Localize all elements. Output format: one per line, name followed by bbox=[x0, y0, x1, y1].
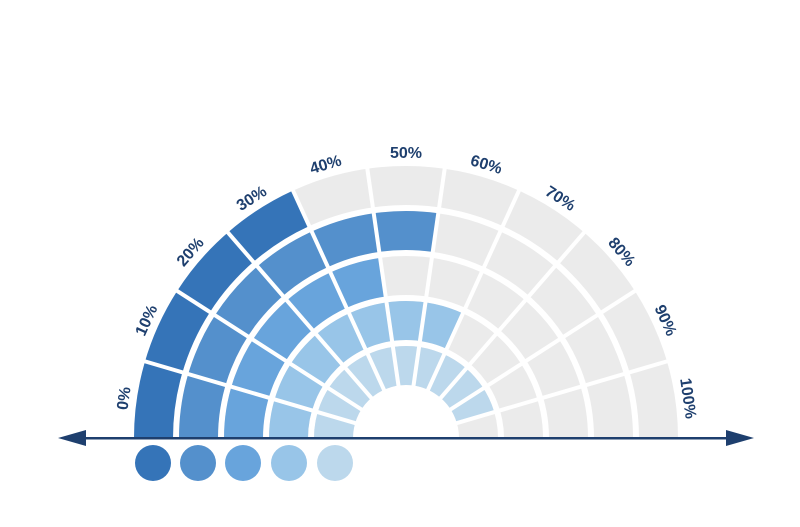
percentage labels: 10% bbox=[133, 302, 161, 339]
percentage labels: 40% bbox=[308, 152, 344, 178]
percentage labels: 50% bbox=[390, 145, 422, 162]
percentage labels: 20% bbox=[174, 235, 208, 270]
percentage labels: 100% bbox=[676, 377, 699, 420]
percentage labels: 70% bbox=[542, 183, 578, 215]
axis arrow bbox=[58, 430, 754, 446]
legend circles bbox=[135, 445, 353, 481]
percentage labels: 0% bbox=[114, 386, 135, 411]
percentage labels: 60% bbox=[468, 152, 504, 178]
percentage labels bbox=[114, 145, 699, 420]
percentage labels: 80% bbox=[604, 235, 638, 270]
gauge rings bbox=[154, 186, 658, 438]
percentage labels: 90% bbox=[651, 302, 679, 339]
percentage labels: 30% bbox=[234, 183, 270, 215]
